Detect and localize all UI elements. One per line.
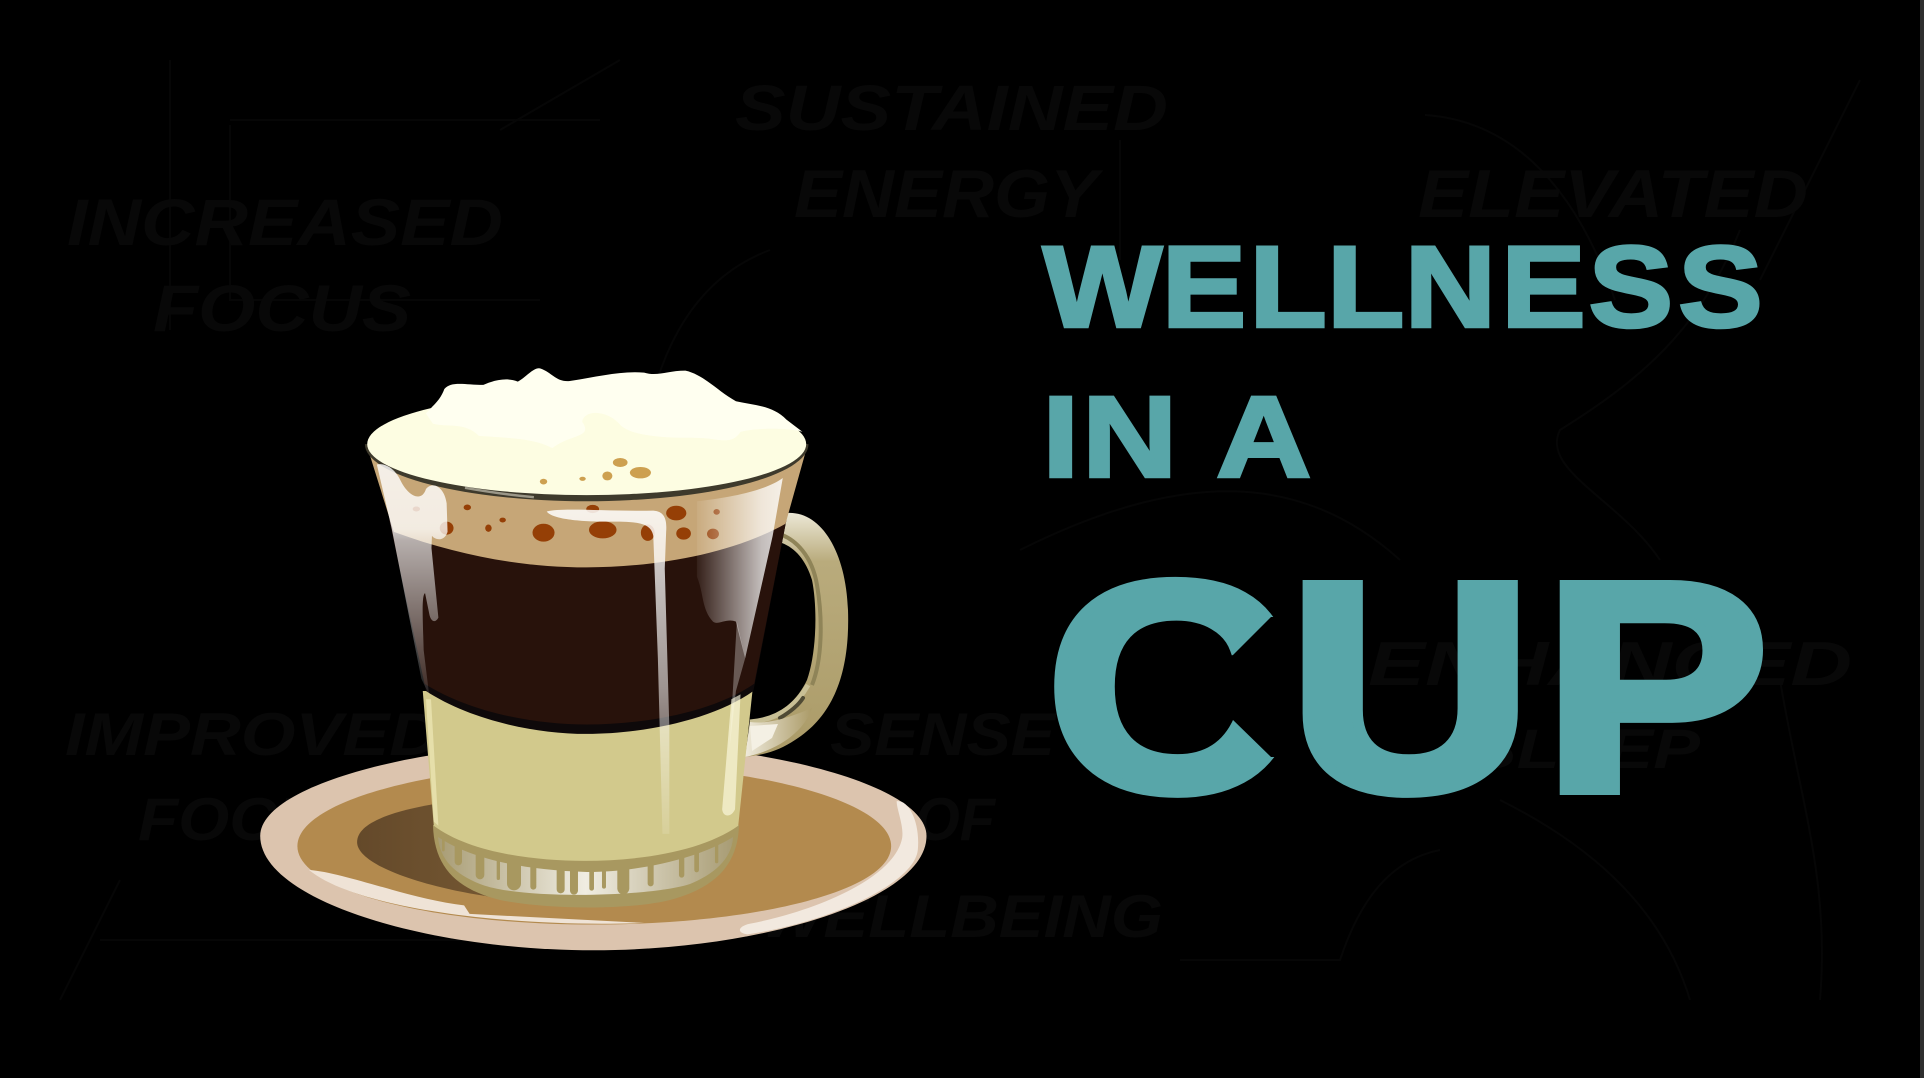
title line: wellness: WELLNESS bbox=[1043, 223, 1763, 351]
letter C opening cut bbox=[1232, 617, 1297, 757]
right edge strip bbox=[1920, 0, 1924, 1078]
whipped foam bbox=[426, 368, 803, 448]
word: enhanced: ENHANCED bbox=[1368, 630, 1852, 699]
word: focus: FOCUS bbox=[153, 271, 411, 345]
cream surface bbox=[367, 393, 806, 495]
right glass highlight bbox=[697, 478, 783, 658]
coffee layer bbox=[389, 520, 786, 734]
cocoa speckles bbox=[413, 505, 720, 542]
centre glass highlight bbox=[547, 510, 669, 834]
custard highlight bbox=[722, 694, 741, 816]
glass base with drips bbox=[433, 825, 739, 908]
rim bbox=[365, 444, 808, 501]
saucer bbox=[260, 742, 927, 950]
word: elevated: ELEVATED bbox=[1418, 156, 1808, 232]
word: focus lower: FOCUS bbox=[138, 786, 368, 853]
word: improved: IMPROVED bbox=[65, 701, 440, 768]
title line: cup: CUP bbox=[1046, 520, 1769, 853]
faint background words bbox=[65, 72, 1852, 950]
left glass highlight bbox=[377, 464, 448, 695]
title line: in a: IN A bbox=[1042, 373, 1311, 502]
glass body bbox=[365, 368, 808, 861]
word: sustained: SUSTAINED bbox=[735, 72, 1168, 144]
caramel sprinkles bbox=[540, 458, 651, 485]
custard layer bbox=[423, 691, 752, 861]
foam layer bbox=[368, 448, 807, 567]
icon: coffee cup on saucer bbox=[260, 368, 927, 950]
word: sleep: SLEEP bbox=[1470, 717, 1701, 780]
word: energy: ENERGY bbox=[794, 156, 1104, 232]
word: increased: INCREASED bbox=[67, 185, 503, 259]
title bbox=[1042, 223, 1769, 853]
mug handle bbox=[745, 513, 848, 757]
word: wellbeing: WELLBEING bbox=[760, 883, 1163, 950]
word: sense: SENSE bbox=[830, 701, 1057, 768]
word: of: OF bbox=[915, 786, 996, 853]
